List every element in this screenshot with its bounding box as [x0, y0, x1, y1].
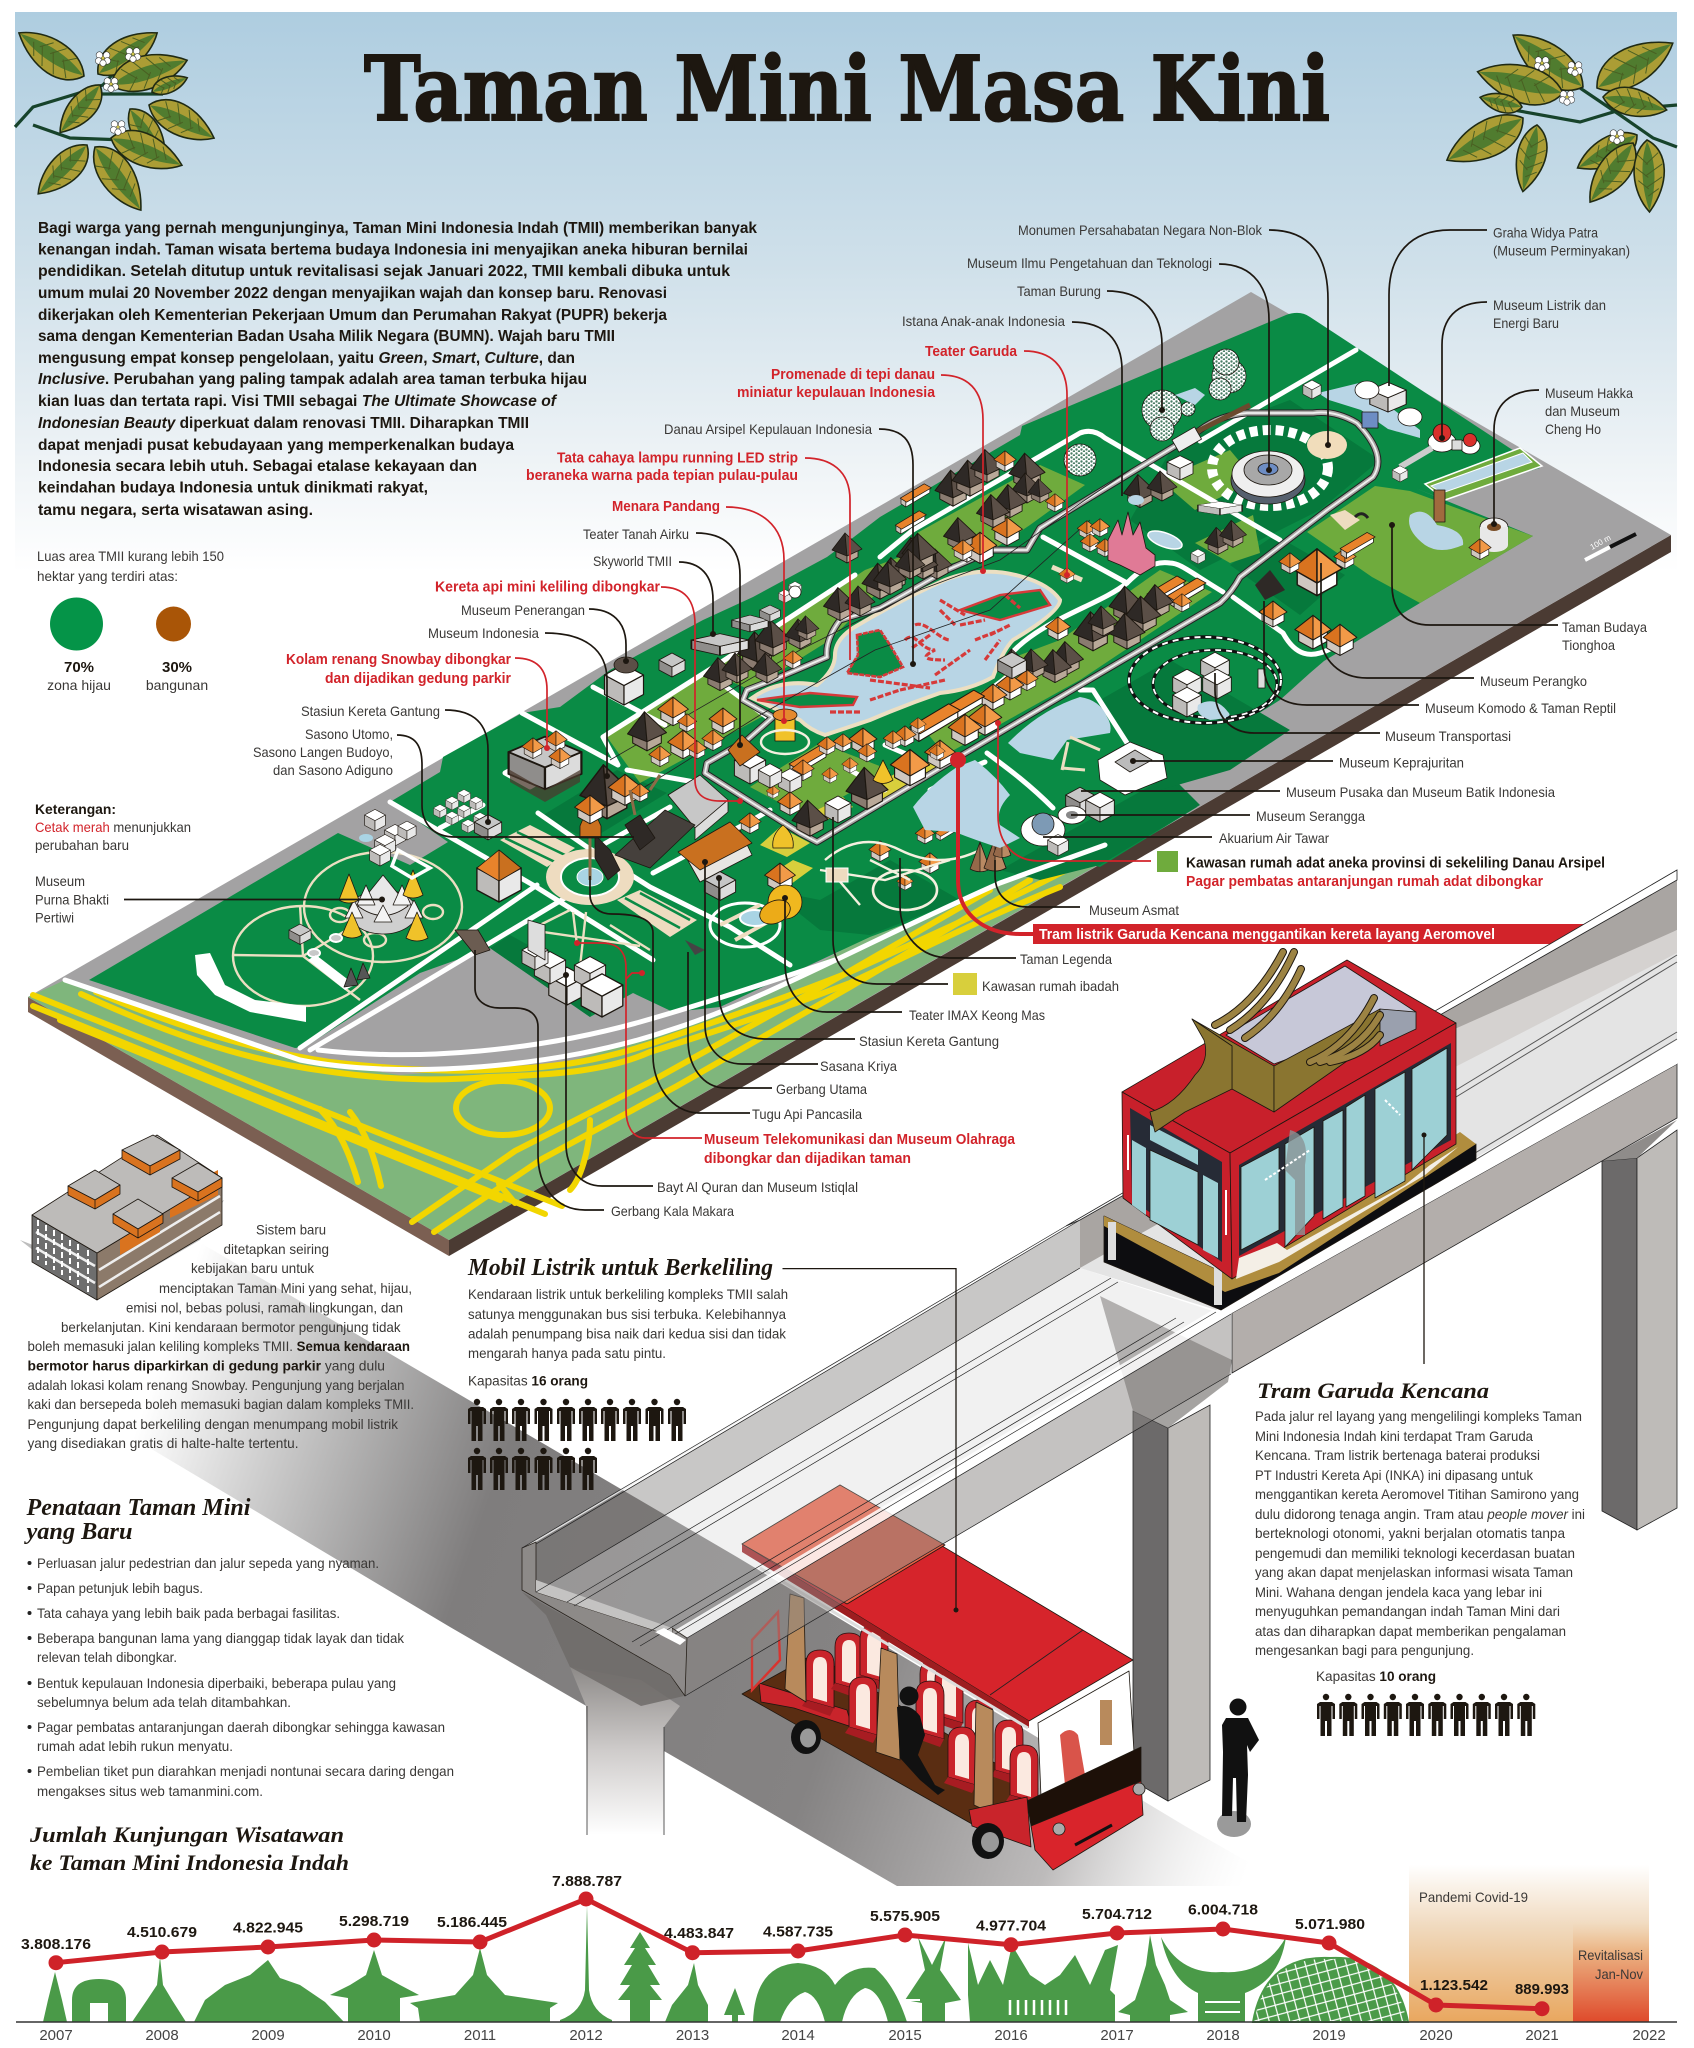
tram garuda kencana block: Mini. Wahana dengan jendela kaca yang lebar ini: [1255, 1584, 1542, 1600]
garuda kencana tram: [1104, 952, 1476, 1310]
label: taman budaya tionghoa: Taman Budaya: [1562, 619, 1647, 635]
label: museum listrik: Energi Baru: [1493, 315, 1559, 331]
penataan bullet list: [28, 1555, 454, 1799]
purna bhakti gardens: [195, 852, 462, 1022]
visitors line chart: [16, 1865, 1677, 2044]
parking policy text: [28, 1222, 414, 1451]
label: museum penerangan: Museum Penerangan: [461, 602, 585, 618]
data labels: 5.575.905: [870, 1908, 940, 1925]
area share stat: 70%: [64, 659, 94, 676]
label: museum perangko: Museum Perangko: [1480, 673, 1587, 689]
tram garuda kencana block: menyuguhkan pemandangan indah Taman Mini dari: [1255, 1603, 1560, 1619]
penataan bullet list: Papan petunjuk lebih bagus.: [37, 1580, 203, 1596]
label: museum asmat: Museum Asmat: [1089, 902, 1179, 918]
electric shuttle bus: [742, 1485, 1145, 1870]
intro text block: [38, 220, 757, 519]
label: keong mas: Teater IMAX Keong Mas: [909, 1007, 1045, 1023]
label: stasiun gantung south: [716, 875, 999, 1049]
area share stat: hektar yang terdiri atas:: [37, 568, 178, 584]
axis: [16, 2021, 1677, 2023]
label: sasana kriya: Sasana Kriya: [820, 1058, 897, 1074]
label: museum hakka: dan Museum: [1545, 403, 1620, 419]
ground shadow band: [100, 1184, 1290, 1886]
bus seats: [802, 1625, 1038, 1811]
map base slab: [28, 292, 1671, 1256]
building silhouettes: [43, 1905, 1408, 2022]
label: museum asmat: [995, 860, 1179, 918]
white road network: [65, 350, 1356, 1070]
label: stasiun kereta gantung: Stasiun Kereta Gantung: [301, 703, 440, 719]
label: taman burung: [1017, 283, 1165, 413]
label: teater garuda: [925, 344, 1070, 578]
intro text block: dikerjakan oleh Kementerian Pekerjaan Umum dan Perumahan Rakyat (PUPR) bekerja: [38, 307, 667, 324]
data labels: 6.004.718: [1188, 1902, 1258, 1919]
label: monumen non-blok: Monumen Persahabatan Negara Non-Blok: [1018, 222, 1263, 238]
tram garuda kencana block: atas dan diharapkan dapat memberikan pengalaman: [1255, 1623, 1566, 1639]
traditional houses: [628, 450, 1375, 892]
label: gerbang kala makara: Gerbang Kala Makara: [611, 1203, 734, 1219]
intro text block: Bagi warga yang pernah mengunjunginya, Taman Mini Indonesia Indah (TMII) memberikan banyak: [38, 220, 757, 237]
label: purna bhakti: Purna Bhakti: [35, 892, 109, 908]
label: tugu api: [590, 876, 862, 1122]
penataan bullet list: Pagar pembatas antaranjungan daerah dibongkar sehingga kawasan: [37, 1719, 445, 1735]
data labels: 889.993: [1515, 1981, 1569, 1998]
year labels: 2022: [1632, 2027, 1666, 2044]
cable car lines: [610, 470, 1130, 790]
label: graha widya patra: [1389, 224, 1630, 386]
tram garuda kencana block: Kencana. Tram listrik bertenaga baterai produksi: [1255, 1447, 1540, 1463]
label: keong mas: [782, 895, 1045, 1023]
label: bayt al quran: [563, 972, 858, 1195]
legend: rumah adat zone: [995, 720, 1605, 890]
toll road strip: [28, 855, 1115, 1240]
year labels: 2020: [1419, 2027, 1453, 2044]
mobil listrik block: mengarah hanya pada satu pintu.: [468, 1345, 666, 1361]
parking policy text: menciptakan Taman Mini yang sehat, hijau,: [159, 1280, 412, 1296]
pandemic and revitalisation bands: [1409, 1865, 1649, 2022]
data labels: 7.888.787: [552, 1873, 622, 1890]
data labels: 3.808.176: [21, 1936, 91, 1953]
label: promenade: [737, 367, 986, 574]
label: stasiun gantung south: Stasiun Kereta Gantung: [859, 1033, 999, 1049]
label: iptek: Museum Ilmu Pengetahuan dan Teknologi: [967, 255, 1212, 271]
area share stat: bangunan: [146, 677, 208, 693]
parking policy text: kebijakan baru untuk: [191, 1260, 315, 1276]
label: menara pandang: Menara Pandang: [612, 499, 720, 515]
label: kolam renang snowbay: Kolam renang Snowbay dibongkar: [286, 652, 511, 668]
mobil listrik block: [467, 1255, 958, 1612]
label: museum hakka: [1491, 385, 1633, 527]
tram garuda kencana block: yang akan dapat menjelaskan informasi wisata Taman: [1255, 1564, 1573, 1580]
label: museum listrik: Museum Listrik dan: [1493, 297, 1606, 313]
data labels: 5.186.445: [437, 1914, 507, 1931]
label: museum listrik: [1439, 297, 1606, 441]
viaduct pillars: [570, 1120, 1677, 1835]
map labels left: [35, 344, 1070, 926]
label: museum komodo: [1264, 601, 1616, 716]
label: menara pandang: [612, 499, 787, 724]
label: museum telekomunikasi: Museum Telekomunikasi dan Museum Olahraga: [704, 1132, 1016, 1148]
legend: rumah adat zone: Kawasan rumah adat aneka provinsi di sekeliling Danau Arsipel: [1186, 856, 1605, 872]
label: graha widya patra: (Museum Perminyakan): [1493, 243, 1630, 259]
viaduct near span: [522, 1218, 1231, 1706]
data labels: 5.071.980: [1295, 1916, 1365, 1933]
penataan heading: yang Baru: [23, 1519, 132, 1545]
visitors trend line: [48, 1892, 1550, 2016]
intro text block: keindahan budaya Indonesia untuk dinikmati rakyat,: [38, 480, 428, 496]
viaduct far span: [1066, 870, 1677, 1373]
year labels: 2016: [994, 2027, 1028, 2044]
tram undercarriage: [1104, 1132, 1476, 1310]
penataan bullet list: Perluasan jalur pedestrian dan jalur sepeda yang nyaman.: [37, 1555, 379, 1571]
label: sasono: dan Sasono Adiguno: [273, 762, 393, 778]
title: Taman Mini Masa Kini: [364, 36, 1330, 141]
label: gerbang utama: [688, 952, 867, 1097]
label: museum hakka: Museum Hakka: [1545, 385, 1633, 401]
museum purna bhakti pertiwi building: [339, 870, 428, 987]
pandemic and revitalisation bands: Jan-Nov: [1595, 1966, 1643, 1982]
tram garuda kencana block: PT Industri Kereta Api (INKA) ini dipasang untuk: [1255, 1467, 1534, 1483]
data labels: 4.977.704: [976, 1918, 1047, 1935]
intro text block: kian luas dan tertata rapi. Visi TMII sebagai The Ultimate Showcase of: [38, 393, 558, 410]
year labels: 2013: [676, 2027, 709, 2044]
label: graha widya patra: Graha Widya Patra: [1493, 224, 1598, 240]
label: tugu api: Tugu Api Pancasila: [752, 1106, 862, 1122]
keong mas and hall buildings: [455, 731, 802, 1017]
label: museum perangko: [1321, 563, 1587, 689]
year labels: 2017: [1100, 2027, 1134, 2044]
parking policy text: bermotor harus diparkirkan di gedung parkir yang dulu: [28, 1358, 385, 1374]
yellow worship zones: [760, 760, 940, 887]
tram garuda kencana block: pengemudi dan memiliki teknologi kecerdasan buatan: [1255, 1545, 1575, 1561]
label: skyworld: [593, 553, 716, 637]
label: iptek: [967, 255, 1272, 473]
year labels: 2009: [251, 2027, 285, 2044]
label: taman burung: Taman Burung: [1017, 283, 1101, 299]
label: museum keprajuritan: Museum Keprajuritan: [1339, 755, 1464, 771]
seated passenger: [897, 1686, 945, 1795]
legend: rumah adat zone: Pagar pembatas antaranjungan rumah adat dibongkar: [1186, 874, 1543, 890]
main green zone: [89, 313, 1540, 1048]
data labels: 5.704.712: [1082, 1906, 1152, 1923]
label: museum penerangan: [461, 602, 629, 664]
label: museum transportasi: [1215, 673, 1511, 744]
data labels: 4.483.847: [664, 1925, 734, 1942]
label: monumen non-blok: [1018, 222, 1331, 448]
plaza and boulevards: [500, 825, 780, 985]
year labels: 2008: [145, 2027, 179, 2044]
intro text block: Indonesian Beauty diperkuat dalam renovasi TMII. Diharapkan TMII: [38, 415, 529, 432]
tram garuda kencana block: Pada jalur rel layang yang mengelilingi kompleks Taman: [1255, 1408, 1582, 1424]
chart heading: ke Taman Mini Indonesia Indah: [30, 1850, 349, 1875]
label: sasono: [253, 726, 634, 837]
intro text block: pendidikan. Setelah ditutup untuk revitalisasi sejak Januari 2022, TMII kembali dibuka untuk: [38, 263, 730, 280]
chart heading: Jumlah Kunjungan Wisatawan: [29, 1822, 344, 1847]
label: kolam renang snowbay: [286, 652, 550, 751]
label: sasono: Sasono Langen Budoyo,: [253, 744, 393, 760]
year labels: 2014: [781, 2027, 815, 2044]
penataan bullet list: Beberapa bangunan lama yang dianggap tidak layak dan tidak: [37, 1630, 405, 1646]
penataan bullet list: Bentuk kepulauan Indonesia diperbaiki, beberapa pulau yang: [37, 1675, 396, 1691]
mobil listrik block: Mobil Listrik untuk Berkeliling: [467, 1255, 773, 1281]
data labels: 4.822.945: [233, 1920, 303, 1937]
label: taman budaya tionghoa: [1389, 522, 1647, 653]
legend note: Keterangan:: [35, 801, 116, 817]
intro text block: dapat menjadi pusat kebudayaan yang memperkenalkan budaya: [38, 437, 514, 454]
tram garuda kencana block: dulu didorong tenaga angin. Tram atau people mover ini: [1255, 1506, 1585, 1522]
label: taman legenda: Taman Legenda: [1020, 951, 1112, 967]
light green house zones: [607, 450, 1533, 817]
year labels: 2019: [1312, 2027, 1346, 2044]
year labels: [39, 2027, 1666, 2044]
data labels: 1.123.542: [1420, 1977, 1488, 1994]
sky background panel: [15, 12, 1677, 572]
parking policy text: ditetapkan seiring: [224, 1241, 329, 1257]
red banner: tram: Tram listrik Garuda Kencana menggantikan kereta layang Aeromovel: [1039, 927, 1495, 943]
map labels right: [475, 222, 1647, 1219]
year labels: 2011: [464, 2027, 496, 2044]
data labels: [21, 1873, 1569, 1998]
intro text block: sama dengan Kementerian Badan Usaha Milik Negara (BUMN). Wajah baru TMII: [38, 328, 615, 345]
garden rings south: [820, 831, 1011, 910]
label: purna bhakti: [35, 873, 385, 926]
tram garuda kencana block: menggantikan kereta Aeromovel Titihan Samirono yang: [1255, 1486, 1579, 1502]
garuda wing feathers: [1215, 952, 1380, 1062]
label: taman budaya tionghoa: Tionghoa: [1562, 637, 1615, 653]
mobil listrik block: Kapasitas 16 orang: [468, 1373, 588, 1389]
penataan heading: Penataan Taman Mini: [25, 1495, 251, 1521]
year labels: 2010: [357, 2027, 391, 2044]
intro text block: Indonesia secara lebih utuh. Sebagai etalase kekayaan dan: [38, 458, 477, 475]
scale bar: [1585, 533, 1636, 560]
area share stat: zona hijau: [47, 677, 111, 693]
mobil listrik block: Kendaraan listrik untuk berkeliling kompleks TMII salah: [468, 1286, 788, 1302]
capacity icons tram: [1317, 1694, 1535, 1736]
label: teater garuda: Teater Garuda: [925, 344, 1018, 360]
label: kereta api mini: Kereta api mini keliling dibongkar: [435, 580, 660, 596]
data labels: 4.587.735: [763, 1924, 833, 1941]
penataan bullet list: Pembelian tiket pun diarahkan menjadi nontunai secara daring dengan: [37, 1763, 454, 1779]
parking policy text: Pengunjung dapat berkeliling dengan menumpang mobil listrik: [28, 1416, 399, 1432]
legend: rumah ibadah: Kawasan rumah ibadah: [982, 978, 1119, 994]
label: sasono: Sasono Utomo,: [305, 726, 393, 742]
label: sasana kriya: [702, 859, 897, 1074]
label: danau arsipel: [664, 421, 916, 667]
label: stasiun kereta gantung: [301, 703, 491, 825]
year labels: 2015: [888, 2027, 922, 2044]
intro text block: umum mulai 20 November 2022 dengan menyajikan wajah dan konsep baru. Renovasi: [38, 285, 667, 302]
area share stat: Luas area TMII kurang lebih 150: [37, 548, 224, 564]
label: kolam renang snowbay: dan dijadikan gedung parkir: [325, 671, 511, 687]
label: tata cahaya: [526, 450, 850, 660]
label: museum telekomunikasi: [574, 940, 1016, 1167]
label: istana anak: Istana Anak-anak Indonesia: [902, 313, 1065, 329]
year labels: 2012: [569, 2027, 603, 2044]
parking policy text: yang disediakan gratis di halte-halte tertentu.: [28, 1435, 298, 1451]
tram garuda kencana block: Kapasitas 10 orang: [1316, 1668, 1436, 1684]
capacity icons bus: [468, 1399, 686, 1490]
label: museum indonesia: [428, 625, 610, 779]
penataan bullet list: Tata cahaya yang lebih baik pada berbagai fasilitas.: [37, 1605, 340, 1621]
penataan bullet list: mengakses situs web tamanmini.com.: [37, 1783, 263, 1799]
chart heading: [29, 1822, 349, 1875]
parking policy text: emisi nol, bebas polusi, ramah lingkungan, dan: [126, 1300, 403, 1316]
parking policy text: kaki dan bersepeda boleh memasuki bagian dalam kompleks TMII.: [28, 1396, 414, 1412]
label: danau arsipel: Danau Arsipel Kepulauan Indonesia: [664, 421, 872, 437]
south east museum district: [913, 637, 1281, 856]
legend note: Cetak merah menunjukkan: [35, 819, 191, 835]
tram garuda kencana block: Tram Garuda Kencana: [1257, 1378, 1489, 1403]
legend note: perubahan baru: [35, 837, 129, 853]
intro text block: kenangan indah. Taman wisata bertema budaya Indonesia ini menyajikan aneka hiburan bernilai: [38, 242, 748, 258]
label: skyworld: Skyworld TMII: [593, 553, 672, 569]
mobil listrik block: satunya menggunakan bus sisi terbuka. Kelebihannya: [468, 1306, 786, 1322]
parking policy text: Sistem baru: [256, 1222, 326, 1238]
label: museum keprajuritan: [1130, 755, 1464, 771]
scale bar: 100 m: [1589, 533, 1613, 552]
standing person for scale: [1217, 1698, 1259, 1837]
parking policy text: berkelanjutan. Kini kendaraan bermotor pengunjung tidak: [61, 1319, 401, 1335]
parking policy text: boleh memasuki jalan keliling kompleks TMII. Semua kendaraan: [28, 1338, 410, 1354]
pandemic and revitalisation bands: Pandemi Covid-19: [1419, 1889, 1528, 1905]
label: purna bhakti: Pertiwi: [35, 910, 74, 926]
data labels: 4.510.679: [127, 1924, 197, 1941]
label: gerbang utama: Gerbang Utama: [776, 1081, 867, 1097]
red banner: tram: [950, 752, 1584, 944]
decorative branch top left: [9, 20, 222, 219]
isometric map of TMII: [28, 292, 1671, 1256]
tram roof and body: [1122, 960, 1456, 1153]
central tower and church: [604, 582, 1026, 788]
label: tata cahaya: beraneka warna pada tepian pulau-pulau: [526, 468, 798, 484]
north museum district: [1045, 349, 1542, 640]
parking policy text: adalah lokasi kolam renang Snowbay. Pengunjung yang berjalan: [28, 1377, 404, 1393]
intro text block: mengusung empat konsep pengelolaan, yaitu Green, Smart, Culture, dan: [38, 350, 575, 367]
legend note: [35, 801, 191, 853]
year labels: 2021: [1525, 2027, 1559, 2044]
area share stat: [37, 548, 224, 693]
tram garuda kencana block: mengesankan bagi para pengunjung.: [1255, 1642, 1474, 1658]
label: akuarium: Akuarium Air Tawar: [1219, 830, 1329, 846]
penataan bullet list: relevan telah dibongkar.: [37, 1649, 177, 1665]
label: museum transportasi: Museum Transportasi: [1385, 728, 1511, 744]
label: museum komodo: Museum Komodo & Taman Reptil: [1425, 700, 1616, 716]
pandemic and revitalisation bands: Revitalisasi: [1578, 1947, 1643, 1963]
darker green blocks: [490, 400, 1380, 1017]
penataan bullet list: sebelumnya belum ada telah ditambahkan.: [37, 1694, 291, 1710]
label: promenade: Promenade di tepi danau: [771, 367, 935, 383]
legend: rumah ibadah: [833, 817, 1119, 995]
label: museum telekomunikasi: dibongkar dan dijadikan taman: [704, 1151, 911, 1167]
label: bayt al quran: Bayt Al Quran dan Museum Istiqlal: [657, 1179, 858, 1195]
penataan bullet list: rumah adat lebih rukun menyatu.: [37, 1738, 233, 1754]
elevated tram loop: [705, 412, 1378, 842]
gray box cluster near entrance: [359, 790, 502, 878]
label: teater tanah airku: [583, 526, 743, 748]
label: museum hakka: Cheng Ho: [1545, 421, 1601, 437]
label: promenade: miniatur kepulauan Indonesia: [737, 385, 936, 401]
label: museum pusaka: Museum Pusaka dan Museum Batik Indonesia: [1286, 784, 1555, 800]
label: museum serangga: Museum Serangga: [1256, 808, 1365, 824]
tram garuda kencana block: Mini Indonesia Indah kini terdapat Tram Garuda: [1255, 1428, 1533, 1444]
intro text block: tamu negara, serta wisatawan asing.: [38, 502, 313, 519]
tram garuda kencana block: [1255, 1132, 1585, 1736]
penataan heading: [23, 1495, 251, 1545]
label: purna bhakti: Museum: [35, 873, 85, 889]
intro text block: Inclusive. Perubahan yang paling tampak adalah area taman terbuka hijau: [38, 371, 587, 388]
year labels: 2018: [1206, 2027, 1240, 2044]
label: museum indonesia: Museum Indonesia: [428, 625, 539, 641]
data labels: 5.298.719: [339, 1913, 409, 1930]
tram roof module: [1150, 966, 1416, 1132]
label: istana anak: [902, 313, 1122, 496]
label: teater tanah airku: Teater Tanah Airku: [583, 526, 689, 542]
label: kereta api mini: [435, 580, 743, 804]
area share stat: 30%: [162, 659, 192, 676]
tram garuda kencana block: berteknologi otonomi, yakni berjalan otomatis tanpa: [1255, 1525, 1565, 1541]
left parking building illustration: [20, 1135, 224, 1300]
decorative branch top right: [1439, 21, 1681, 212]
lake and archipelago: [752, 572, 1060, 735]
label: gerbang kala makara: [475, 950, 734, 1219]
label: taman legenda: [900, 858, 1112, 967]
label: tata cahaya: Tata cahaya lampu running LED strip: [557, 450, 798, 466]
year labels: 2007: [39, 2027, 73, 2044]
mobil listrik block: adalah penumpang bisa naik dari kedua sisi dan tidak: [468, 1326, 787, 1342]
